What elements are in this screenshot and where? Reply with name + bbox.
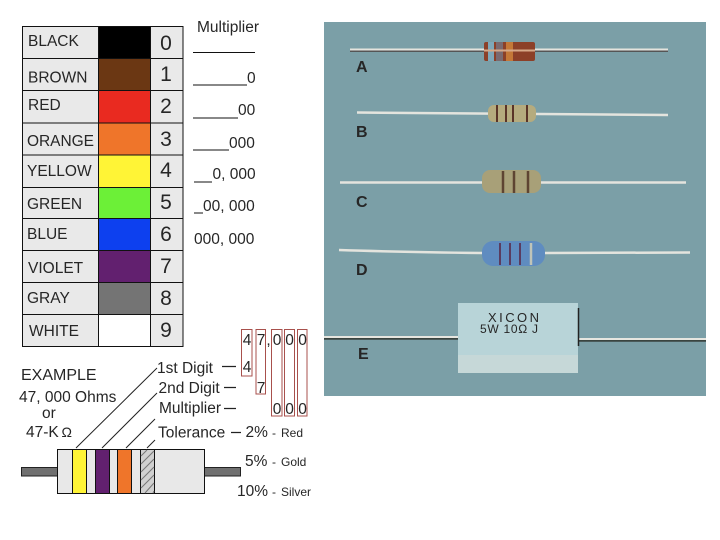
digit values: 0 xyxy=(160,32,172,55)
band labels xyxy=(157,360,241,442)
tolerance values: - xyxy=(272,485,276,499)
resistor E xyxy=(324,303,706,373)
digit values: 4 xyxy=(160,159,172,182)
tolerance values: Silver xyxy=(281,485,311,499)
example text: 47, 000 Ohms xyxy=(19,389,117,406)
worked example digits: 0 xyxy=(298,332,307,349)
colour names: BROWN xyxy=(28,70,87,86)
worked example digits: 0 xyxy=(273,332,282,349)
worked example digits: , xyxy=(266,332,271,349)
tolerance values: 2% xyxy=(246,424,268,441)
worked example digits: 7 xyxy=(257,332,265,349)
worked example digits: 0 xyxy=(285,332,294,349)
multiplier column xyxy=(193,19,259,248)
multiplier column: 00 xyxy=(238,102,256,119)
digit values xyxy=(160,32,172,342)
colour names: WHITE xyxy=(29,323,79,340)
resistor C xyxy=(340,170,686,193)
digit values: 8 xyxy=(160,287,172,310)
worked example digits: 0 xyxy=(298,401,307,418)
letter C: C xyxy=(356,194,368,211)
worked example digits: 0 xyxy=(285,401,294,418)
worked example digits: 4 xyxy=(243,332,252,349)
example text: or xyxy=(42,405,56,422)
resistor diagram xyxy=(22,368,240,494)
tolerance values xyxy=(237,424,311,500)
digit values: 5 xyxy=(160,191,172,214)
tolerance values: 10% xyxy=(237,483,268,500)
leader lines xyxy=(76,368,157,448)
resistor E: XICON xyxy=(488,310,539,325)
example text: EXAMPLE xyxy=(21,367,97,384)
worked example digits: 0 xyxy=(273,401,282,418)
letter E: E xyxy=(358,346,369,363)
worked example digits: 4 xyxy=(243,359,252,376)
digit values: 7 xyxy=(160,255,172,278)
digit values: 2 xyxy=(160,95,172,118)
multiplier column: Multiplier xyxy=(197,19,259,36)
tolerance values: Gold xyxy=(281,455,306,469)
tolerance values: 5% xyxy=(245,453,268,470)
tolerance values: Red xyxy=(281,426,303,440)
band labels: 2nd Digit xyxy=(158,380,220,397)
multiplier column: 0 xyxy=(247,70,256,87)
red digit boxes xyxy=(242,330,307,416)
colour names: RED xyxy=(28,97,61,114)
resistor E: 5W 10Ω J xyxy=(480,322,538,336)
colour bands xyxy=(72,450,154,494)
digit values: 6 xyxy=(160,223,172,246)
tolerance values: - xyxy=(272,455,276,469)
example text: 47-K xyxy=(26,424,59,441)
digit values: 1 xyxy=(160,63,172,86)
panel: colour code table xyxy=(22,26,183,346)
resistor D xyxy=(339,241,690,266)
multiplier column: 000, 000 xyxy=(194,231,255,248)
colour names: VIOLET xyxy=(28,260,84,277)
resistor A xyxy=(350,42,668,61)
resistor B xyxy=(357,105,668,122)
colour names: BLUE xyxy=(27,226,68,243)
band labels: Tolerance xyxy=(158,424,225,442)
tolerance values: - xyxy=(272,426,276,440)
worked example digits xyxy=(242,330,307,418)
band labels: 1st Digit xyxy=(157,360,214,377)
colour names: GRAY xyxy=(27,290,70,307)
resistor body xyxy=(58,450,204,494)
multiplier column: 000 xyxy=(229,135,255,152)
band labels: Multiplier xyxy=(159,400,221,417)
colour names: ORANGE xyxy=(27,133,94,150)
multiplier column: 00, 000 xyxy=(203,198,255,215)
leads xyxy=(22,468,240,476)
digit values: 9 xyxy=(160,319,172,342)
panel: resistor photo xyxy=(324,22,706,396)
colour names: GREEN xyxy=(27,196,82,213)
digit values: 3 xyxy=(160,128,172,151)
letter D: D xyxy=(356,262,368,279)
colour names: BLACK xyxy=(28,33,79,50)
letter A: A xyxy=(356,59,368,76)
multiplier column: 0, 000 xyxy=(212,166,256,183)
colour names: YELLOW xyxy=(27,163,92,180)
letter B: B xyxy=(356,124,368,141)
example text xyxy=(19,367,117,441)
worked example digits: 7 xyxy=(257,380,265,397)
colour swatches xyxy=(98,26,150,346)
colour names xyxy=(27,33,94,340)
example text: Ω xyxy=(62,424,72,440)
